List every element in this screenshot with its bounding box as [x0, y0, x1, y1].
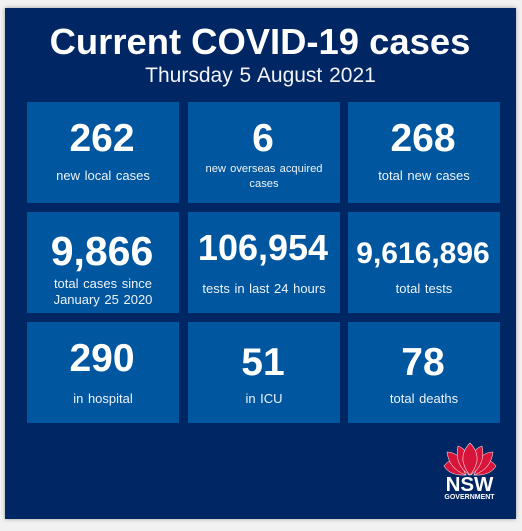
panel: total deaths: total deaths	[390, 391, 458, 406]
panel: new local cases: 262	[69, 117, 135, 160]
panel: total cases since January 25 2020: 9,866	[51, 228, 153, 274]
panel: in ICU	[188, 322, 340, 423]
icon: NSW Government logo	[444, 442, 496, 501]
panel: in ICU: 51	[241, 341, 285, 384]
panel: total tests: total tests	[396, 281, 452, 296]
panel: new local cases	[27, 102, 179, 203]
panel: total new cases: 268	[390, 117, 456, 160]
date subtitle: Thursday 5 August 2021	[145, 64, 376, 87]
panel: in ICU: in ICU	[245, 391, 283, 406]
panel: total deaths	[348, 322, 500, 423]
panel: tests in last 24 hours: tests in last 24 hours	[202, 281, 326, 296]
panel: new overseas acquired cases: new overseas acquired	[205, 163, 323, 175]
panel: total deaths: 78	[401, 341, 445, 384]
panel: total cases since January 25 2020	[27, 212, 179, 313]
panel: total tests	[348, 212, 500, 313]
panel: new overseas acquired cases: 6	[252, 117, 274, 160]
panel: in hospital: 290	[69, 337, 135, 380]
panel: tests in last 24 hours: 106,954	[198, 227, 328, 268]
panel: in hospital	[27, 322, 179, 423]
title: Current COVID-19 cases	[50, 21, 470, 62]
panel: tests in last 24 hours	[188, 212, 340, 313]
NSW wordmark: NSW	[446, 473, 494, 496]
panel: in hospital: in hospital	[73, 391, 133, 406]
panel: total cases since January 25 2020: total cases since	[54, 276, 152, 291]
panel: new overseas acquired cases: cases	[249, 178, 279, 190]
panel: total new cases	[348, 102, 500, 203]
Government wordmark: GOVERNMENT	[444, 494, 495, 501]
panel: total new cases: total new cases	[378, 168, 470, 183]
panel: new overseas acquired cases	[188, 102, 340, 203]
icon: waratah flower	[444, 443, 496, 475]
panel: total tests: 9,616,896	[356, 237, 490, 270]
panel: new local cases: new local cases	[56, 168, 150, 183]
panel: total cases since January 25 2020: January 25 2020	[54, 292, 152, 307]
